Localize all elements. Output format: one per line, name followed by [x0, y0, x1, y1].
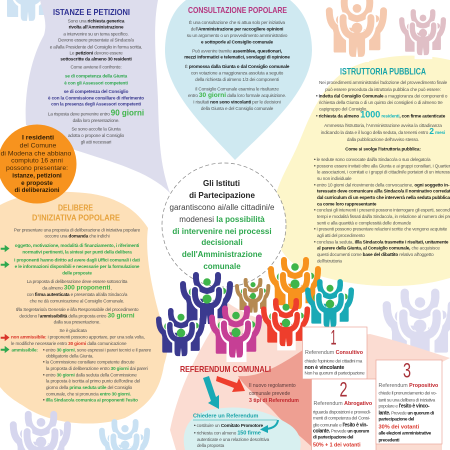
card: referendum abrogativo: glio comunale e l'esito è vin-: [313, 422, 368, 428]
panel: delibere text: con firma autenticata e presentata al/alla Sindaco/a: [27, 292, 128, 297]
panel: istruttoria pubblica text: su non individuale: [317, 176, 352, 181]
card: referendum consultivo: [302, 326, 367, 379]
panel: delibere text: Il/la Segretario/a Generale e il/la Responsabile del procedimento: [16, 307, 139, 312]
decorative people group: lavender bottom left: [13, 414, 68, 450]
panel: istruttoria pubblica text: • le sedute sono convocate dal/la Sindaco/a o suo delegato/a: [314, 157, 431, 162]
panel: consultazione popolare text: I risultati non sono vincolanti per le decisioni: [193, 100, 281, 105]
panel: delibere text: le modifiche necessarie entro 30 giorni dalla comunicazione: [11, 341, 127, 346]
panel: consultazione popolare text: [184, 5, 290, 111]
panel: delibere text: da almeno 300 proponenti,: [42, 284, 112, 292]
heading: delibere d'iniziativa popolare: DELIBERE: [58, 202, 93, 212]
panel: consultazione popolare text: Può avvenire tramite assemblee, questionari,: [192, 48, 282, 53]
panel: istruttoria pubblica text: Nei procedimenti amministrativi l'adozione del provvedimento finale: [319, 80, 448, 85]
panel: istruttoria pubblica text: • conclusa la seduta, il/la Sindaco/a trasmette i risultati, unitamente: [314, 239, 449, 244]
text: tre tipi di referendum: Il nuovo regolamento: [249, 383, 296, 389]
panel: referendum comunali: autenticate e una relazione descrittiva: [197, 437, 270, 442]
panel: delibere text: ammissibile:: [12, 347, 38, 352]
panel: delibere text: • la Commissione consiliare competente discute: [43, 360, 135, 365]
panel: referendum comunali: [180, 364, 299, 448]
panel: istruttoria pubblica text: le associazioni, i comitati e i gruppi di cittadini/e portatori di un interesse: [317, 170, 450, 175]
panel: istruttoria pubblica text: indicando la data e il luogo della seduta, da tenersi entro 2 mesi: [321, 126, 445, 136]
panel: delibere text: e le informazioni disponibili e necessarie per la formulazione: [15, 264, 140, 269]
istanze e petizioni text: è con la Commissione consiliare di riferimento: [48, 95, 144, 100]
card: referendum abrogativo: [312, 378, 376, 450]
panel: istruttoria pubblica text: • i presenti possono presentare relazioni scritte che vengono acquisite: [314, 227, 448, 232]
card: referendum propositivo: tanti su una delibera di iniziativa: [378, 398, 436, 403]
istanze e petizioni text: sottoscritte da almeno 30 residenti: [60, 57, 132, 62]
panel: delibere text: comunale, che si pronuncia entro 30 giorni.: [46, 391, 131, 396]
card: referendum propositivo: lante. Prevede un quorum di: [378, 410, 434, 416]
panel: referendum comunali: della proposta: [197, 443, 225, 448]
heading: consultazione popolare: CONSULTAZIONE POPOLARE: [188, 5, 287, 15]
heading: referendum comunali: REFERENDUM COMUNALI: [180, 364, 271, 374]
panel: istruttoria pubblica text: tempi e modalità fissati dal/la Sindaco/a, in relazione al numero dei pre-: [317, 214, 450, 219]
decorative people group: blue bottom: [102, 422, 147, 450]
card: referendum abrogativo: Referendum Abrogativo: [314, 401, 373, 407]
panel: istruttoria pubblica text: agli atti del procedimento: [317, 233, 365, 238]
icon: green arrow: [1, 246, 9, 252]
panel: delibere text: la proposta di deliberazione entro 30 giorni dai pareri: [46, 366, 148, 371]
card: referendum abrogativo: 50% + 1 dei votanti: [313, 442, 361, 448]
panel: consultazione popolare text: Il Consiglio Comunale esamina le risultanze: [195, 86, 279, 91]
card: referendum abrogativo: 2: [340, 378, 348, 402]
panel: consultazione popolare text: mezzi informatici e telematici, sondaggi di opinione: [184, 55, 290, 60]
panel: istruttoria pubblica text: richiesta della Giunta o di un quinto dei consiglieri o di almeno tre: [319, 100, 443, 105]
panel: istruttoria pubblica text: capigruppo del Consiglio,: [319, 106, 367, 111]
decorative people group: lavender right: [387, 293, 450, 361]
icon: red people group: [264, 301, 307, 346]
icon: magenta people group: [212, 308, 259, 358]
panel: istruttoria pubblica text: dal curriculum di un esperto che interverrà nella seduta pubblica: [317, 195, 450, 200]
panel: consultazione popolare text: su un argomento o un provvedimento amministrativo: [187, 33, 288, 38]
card: referendum propositivo: precedenti: [378, 438, 399, 443]
arrow: red: [216, 376, 245, 392]
panel: delibere text: occorre una domanda che indichi: [45, 233, 110, 238]
istanze e petizioni text: gli atti necessari: [81, 139, 111, 144]
panel: istruttoria pubblica text: Come si svolge l'istruttoria pubblica:: [345, 147, 421, 152]
icon: red arrow: [1, 334, 9, 340]
istanze e petizioni text: se di competenza della Giunta: [65, 74, 128, 79]
panel: delibere text: La proposta di deliberazione deve essere sottoscritta: [27, 279, 128, 284]
icon: navy people group lower: [159, 311, 202, 356]
istanze e petizioni text: è con gli Assessori competenti: [64, 80, 128, 85]
panel: istruttoria pubblica text: dalla pubblicazione dell'avviso stesso.: [347, 137, 419, 142]
callout: i residenti: e proposte: [21, 180, 53, 187]
heading: chiedere un referendum: Chiedere un Referendum: [193, 414, 259, 420]
istanze e petizioni text: adotta o propone al Consiglio: [68, 133, 125, 138]
panel: delibere text: • Il/la Sindaco/a comunica ai proponenti l'esito: [43, 398, 138, 403]
istanze e petizioni text: dalla loro presentazione.: [73, 118, 119, 123]
central circle: gli istituti di partecipazione: modenesi la possibilità: [179, 215, 265, 224]
card: referendum consultivo: Referendum Consultivo: [305, 350, 364, 356]
panel: delibere text: [1, 202, 152, 403]
panel: istruttoria pubblica text: • conclusi gli interventi i presenti possono interrogare gli esperti, secondo: [314, 208, 450, 213]
panel: consultazione popolare text: entro 30 giorni dalla loro formale acquisizione.: [188, 92, 286, 99]
arrow: teal: [203, 376, 219, 409]
card: referendum consultivo: chiede l'opinione dei cittadini ma: [304, 358, 363, 364]
central circle: gli istituti di partecipazione: comunale: [203, 262, 241, 271]
card: referendum abrogativo: riguarda disposizioni e provvedi-: [313, 409, 371, 414]
card: referendum propositivo: chiede il pronunciamento dei vo-: [378, 391, 437, 396]
central circle: gli istituti di partecipazione: dell'Amministrazione: [182, 250, 263, 259]
icon: navy people group upper: [183, 275, 230, 324]
panel: delibere text: i proponenti hanno diritto ad avere dagli Uffici comunali i dati: [14, 258, 140, 263]
panel: referendum comunali: • richiesta con almeno 150 firme: [194, 430, 261, 436]
callout: i residenti: di Modena che abbiano: [1, 150, 72, 158]
panel: istruttoria pubblica background: [273, 56, 450, 286]
panel: istruttoria pubblica text: • entro 10 giorni dal ricevimento della convocazione, ogni soggetto in-: [314, 182, 450, 187]
panel: delibere text: Se è giudicata: [59, 328, 87, 333]
heading: istruttoria pubblica: ISTRUTTORIA PUBBLICA: [340, 66, 426, 76]
panel: consultazione popolare text: È una consultazione che si attua solo per iniziativa: [189, 19, 286, 25]
card: referendum propositivo: popolare e l'esito è vinco-: [378, 404, 430, 410]
card: referendum abrogativo: di partecipazione del: [313, 435, 353, 440]
card: referendum consultivo: Non ha quorum di partecipazione: [304, 371, 365, 376]
card: referendum propositivo: 30% dei votanti: [378, 424, 420, 430]
central circle: gli istituti di partecipazione: di intervenire nei processi: [172, 227, 272, 236]
istanze e petizioni text: se di competenza del Consiglio: [64, 89, 129, 94]
panel: istruttoria pubblica text: • indetta dal Consiglio Comunale a maggioranza dei componenti o: [316, 94, 448, 99]
panel: istanze e petizioni background: [26, 0, 170, 193]
panel: consultazione popolare text: e sottoporle al Consiglio comunale: [201, 39, 274, 44]
card: referendum propositivo: Referendum Propositivo: [378, 383, 439, 389]
card: referendum propositivo: alle elezioni amministrative: [378, 431, 432, 436]
central circle: gli istituti di partecipazione: decisionali: [201, 238, 243, 247]
panel: consultazione popolare text: dell'Amministrazione per raccogliere opinioni: [191, 27, 283, 32]
istanze e petizioni text: rivolta all'Amministrazione: [69, 25, 124, 30]
panel: consultazione popolare background: [165, 0, 312, 160]
panel: istruttoria pubblica text: può essere preceduta da istruttoria pubblica che può essere:: [325, 87, 441, 92]
panel: istruttoria pubblica text: ca come loro rappresentante: [317, 201, 377, 206]
panel: consultazione popolare text: con votazione a maggioranza assoluta a seguito: [191, 70, 284, 75]
panel: delibere text: dalla sua presentazione.: [54, 319, 100, 324]
callout: i residenti: istanze, petizioni: [12, 172, 62, 180]
central circle: gli istituti di partecipazione: Gli Istituti: [203, 179, 240, 188]
text: tre tipi di referendum: 3 tipi di Referendum: [249, 398, 299, 404]
panel: istruttoria pubblica text: al parere della Giunta, al Consiglio comunale, che acquisisce: [317, 246, 440, 251]
panel: delibere text: D'INIZIATIVA POPOLARE: [32, 212, 120, 222]
card: referendum propositivo: [376, 360, 442, 444]
icon: green arrow: [1, 262, 9, 268]
callout: i residenti: possono presentare:: [6, 165, 68, 172]
panel: istruttoria pubblica text: [314, 66, 450, 263]
istanze e petizioni text: e al/alla Presidente del Consiglio in forma scritta.: [50, 44, 142, 49]
icon: teal people group: [308, 282, 351, 327]
panel: consultazione popolare text: della Giunta e del Consiglio comunale: [201, 106, 274, 111]
callout: i residenti: [0, 124, 76, 204]
panel: delibere text: • entro 30 giorni, sono espressi i pareri tecnici e il parere: [43, 347, 152, 352]
panel: delibere text: Per presentare una proposta di deliberazione di iniziativa popolare: [14, 228, 141, 233]
callout: i residenti: I residenti: [22, 134, 54, 142]
arrow: curved teal: [260, 420, 278, 433]
panel: istruttoria pubblica text: • possono essere invitati oltre alla Giunta e ai gruppi consiliari, i Quartieri: [314, 163, 450, 168]
panel: delibere text: giorno della prima seduta utile del Consiglio: [46, 385, 133, 390]
panel: istruttoria pubblica text: Ammessa l'istruttoria, l'Amministrazione avvisa la cittadinanza: [324, 123, 442, 128]
panel: delibere text: obbligatorio della Giunta.: [46, 354, 93, 359]
card: referendum abrogativo: colante. Prevede un quorum: [313, 429, 369, 435]
panel: istruttoria pubblica text: teressato deve comunicare al/la Sindaco/a il nominativo corredato: [317, 189, 450, 194]
decorative background people: top left: [3, 0, 52, 21]
panel: chiedere un referendum background: [184, 407, 301, 450]
panel: delibere text: oggetto, motivazione, modalità di finanziamento, i riferimenti: [15, 243, 139, 248]
panel: delibere text: la proposta è iscritta al primo punto dell'ordine del: [46, 379, 140, 384]
istanze e petizioni text: con la presenza degli Assessori competenti: [51, 102, 141, 107]
card: referendum propositivo: partecipazione del: [378, 416, 414, 421]
istanze e petizioni text: Se sono accolte la Giunta: [71, 127, 121, 132]
istanze e petizioni text: La risposta deve pervenire entro 90 giorni: [48, 108, 144, 118]
panel: delibere text: delle proposte: [62, 270, 92, 275]
panel: referendum comunali: • costituire un Comitato Promotore: [194, 423, 264, 428]
panel: referendum background: [170, 303, 450, 450]
decorative people group: peach: [329, 0, 384, 57]
panel: salmon callout background: [238, 344, 345, 450]
central circle: gli istituti di partecipazione: [162, 163, 286, 287]
panel: delibere text: che ne dà comunicazione al Consiglio Comunale.: [30, 298, 124, 303]
callout: i residenti: del Comune: [20, 142, 57, 150]
heading: istanze e petizioni: ISTANZE E PETIZIONI: [53, 7, 130, 17]
card: referendum consultivo: non è vincolante: [304, 365, 344, 371]
decorative people group: mauve: [402, 12, 443, 55]
card: referendum propositivo: 3: [403, 360, 411, 382]
icon: green arrow: [1, 346, 9, 352]
panel: delibere text: non ammissibile: i proponenti possono apportare, per una sola volta,: [11, 335, 145, 340]
panel: istruttoria pubblica text: • richiesta da almeno 1000 residenti, con firme autenticate: [316, 110, 446, 120]
panel: consultazione popolare text: della richiesta di almeno 1/3 dei componenti: [195, 77, 279, 82]
central circle: gli istituti di partecipazione: di Partecipazione: [189, 191, 255, 200]
panel: delibere text: decidono l'ammissibilità della proposta entro 30 giorni: [19, 312, 135, 320]
panel: delibere background: [0, 192, 168, 424]
callout: i residenti: compiuto 16 anni: [11, 158, 63, 164]
istanze e petizioni text: Devono essere presentate al Sindaco/a: [58, 38, 134, 43]
panel: istruttoria pubblica text: senti e alla quantità e complessità delle domande: [317, 220, 412, 225]
panel: delibere text: normativi pertinenti, la sintesi per punti della delibera: [22, 249, 132, 254]
callout: i residenti: di deliberazioni: [14, 187, 60, 194]
panel: istruttoria pubblica text: dell'istruttoria: [317, 258, 342, 263]
panel: delibere text: • entro 30 giorni dalla seduta della Commissione: [43, 372, 137, 377]
icon: brown people group: [237, 280, 268, 313]
istanze e petizioni text: Come avviene il confronto:: [70, 65, 122, 70]
istanze e petizioni text: [48, 7, 144, 144]
istanze e petizioni text: Le petizioni devono essere: [69, 51, 123, 56]
istanze e petizioni text: a intervenire su un tema specifico.: [63, 31, 129, 36]
panel: consultazione popolare text: È promossa dalla Giunta o dal Consiglio comunale: [185, 63, 290, 69]
icon: orange people group: [271, 260, 318, 309]
panel: istruttoria pubblica text: questi documenti come base del dibattito relativo all'oggetto: [317, 252, 434, 257]
text: tre tipi di referendum: [249, 383, 299, 404]
text: tre tipi di referendum: comunale prevede: [249, 391, 290, 397]
istanze e petizioni text: Sono una richiesta generica: [68, 18, 125, 23]
central circle: gli istituti di partecipazione: garantiscono ai/alle cittadini/e: [170, 203, 275, 212]
card: referendum abrogativo: menti di competenza del Consi-: [313, 416, 371, 421]
card: referendum consultivo: 1: [330, 326, 336, 350]
